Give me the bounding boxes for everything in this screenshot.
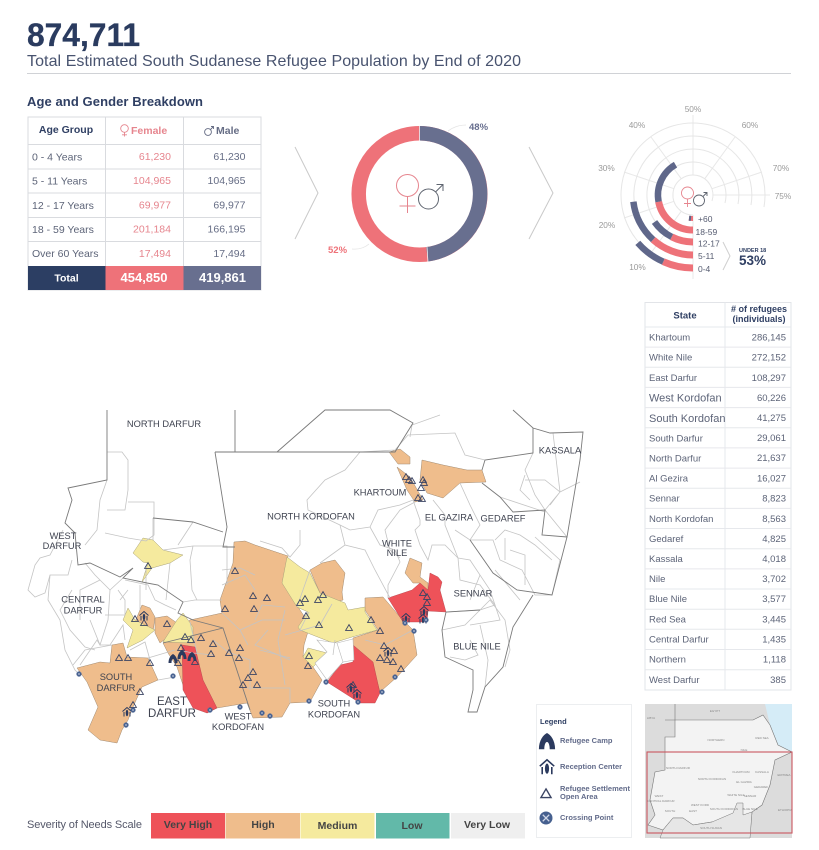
map labels: state names: BLUE NILE (453, 642, 501, 652)
inset map: location of Sudan: WEST KORD (691, 803, 710, 807)
donut chart: gender split: 52% (328, 245, 348, 256)
map labels: state names: DARFUR (43, 541, 82, 551)
title: total refugee population (27, 17, 791, 74)
legend: map symbols: Open Area (560, 792, 598, 801)
table: age and gender breakdown: 61,230 (213, 151, 246, 163)
map boundaries: localities (28, 415, 580, 703)
table: age and gender breakdown: Age Group (39, 124, 93, 136)
table: refugees by state: 286,145 (752, 332, 786, 344)
table: refugees by state: 3,577 (762, 594, 786, 605)
table: refugees by state: South Kordofan (649, 413, 725, 425)
table: refugees by state: 8,823 (762, 494, 786, 504)
radial bar chart: age distribution: 20% (599, 220, 616, 230)
table: refugees by state: Nile (649, 574, 665, 585)
map labels: state names: DARFUR (97, 683, 136, 693)
inset map: location of Sudan: BLUE NILE (742, 807, 758, 811)
table: refugees by state: 385 (770, 675, 786, 686)
map labels: state names: NILE (387, 548, 407, 558)
inset map: location of Sudan (645, 704, 792, 838)
table: refugees by state: 60,226 (757, 393, 786, 404)
radial bar chart: age distribution: 50% (685, 104, 702, 114)
map labels: state names (43, 419, 582, 732)
inset map: location of Sudan: EL GAZIRA (736, 780, 752, 784)
severity scale: Very Low (464, 819, 511, 831)
map icons: refugee settlement triangles (116, 474, 430, 707)
bars: pink female arcs (653, 202, 693, 268)
map areas: unfilled pockets (315, 639, 354, 680)
table: refugees by state: Al Gezira (649, 474, 689, 484)
legend: map symbols: Reception Center (560, 762, 622, 771)
inset map: location of Sudan: SOUTH SUDAN (700, 826, 722, 830)
severity scale: Severity of Needs Scale (27, 819, 142, 831)
inset map: location of Sudan: CENTRAL DARFUR (647, 799, 675, 803)
table: refugees by state: 4,018 (762, 554, 786, 565)
inset map: location of Sudan: WEST (655, 794, 663, 798)
legend: map symbols: Refugee Camp (560, 736, 613, 745)
table: refugees by state: Gedaref (649, 534, 684, 545)
table: refugees by state: Central Darfur (649, 634, 709, 646)
legend: map symbols (536, 704, 632, 838)
radial bar chart: age distribution: 60% (742, 120, 759, 130)
radial bar chart: age distribution: +60 (698, 214, 713, 224)
map icons: reception centers (122, 606, 428, 716)
severity scale: Very High (164, 819, 212, 831)
table: age and gender breakdown: 104,965 (208, 175, 246, 187)
map labels: state names: KORDOFAN (212, 722, 264, 732)
table: refugees by state: Kassala (649, 554, 684, 565)
table: refugees by state: 3,445 (762, 614, 786, 626)
table: refugees by state: State (673, 310, 697, 322)
inset map: location of Sudan: ERITREA (777, 773, 791, 777)
donut chart: gender split: 48% (469, 122, 489, 133)
icon: crossing point (540, 812, 552, 824)
severity scale: High (251, 819, 275, 831)
table: refugees by state: 41,275 (757, 413, 786, 424)
radial bar chart: age distribution: UNDER 18 (739, 248, 766, 254)
map labels: state names: WHITE (382, 538, 412, 548)
map boundaries: states (65, 410, 583, 712)
table: age and gender breakdown: 17,494 (213, 248, 246, 260)
map labels: state names: EL GAZIRA (425, 512, 474, 522)
icon: female symbol (396, 174, 418, 213)
map labels: state names: SOUTH (100, 672, 132, 682)
table: age and gender breakdown: 61,230 (139, 151, 171, 163)
radial bar chart: age distribution: 5-11 (698, 251, 715, 261)
radial bar chart: age distribution: 40% (629, 120, 646, 130)
bars: blue male arcs (633, 165, 691, 262)
table: refugees by state: 1,435 (762, 634, 786, 646)
table: refugees by state: Khartoum (649, 332, 690, 344)
inset map: location of Sudan: NORTH KORDOFAN (698, 777, 726, 781)
table: age and gender breakdown: 0 - 4 Years (32, 152, 82, 164)
map labels: state names: WEST (50, 531, 77, 541)
heading: age and gender breakdown: Age and Gender Breakdown (27, 94, 203, 109)
table: age and gender breakdown: 69,977 (139, 200, 171, 212)
table: refugees by state: Blue Nile (649, 594, 687, 605)
map labels: state names: WEST (225, 712, 252, 722)
table: refugees by state: Northern (649, 654, 686, 666)
table: age and gender breakdown: Over 60 Years (32, 248, 99, 260)
table: refugees by state: 272,152 (752, 352, 786, 364)
title: total refugee population: Total Estimated South Sudanese Refugee Population by End of 2020 (27, 53, 521, 70)
radial bar chart: age distribution: 0-4 (698, 264, 711, 274)
map areas: medium severity (123, 538, 377, 667)
icon: female symbol small (682, 187, 694, 207)
map areas: high severity (77, 449, 486, 743)
icon: male in table header (205, 126, 214, 135)
arrow: chevron left (295, 147, 318, 239)
map icons: refugee camps (168, 650, 196, 663)
inset map: location of Sudan: GEDAREF (754, 785, 768, 789)
table: age and gender breakdown: 104,965 (133, 175, 171, 187)
table: refugees by state: 3,702 (762, 574, 786, 585)
table: refugees by state: North Darfur (649, 454, 701, 464)
severity scale: Medium (318, 820, 357, 832)
donut chart: gender split (328, 122, 489, 262)
table: refugees by state: East Darfur (649, 373, 697, 384)
table: age and gender breakdown: 5 - 11 Years (32, 176, 87, 188)
table: refugees by state: # of refugees (731, 304, 787, 314)
legend: map symbols: Legend (540, 717, 567, 726)
table: age and gender breakdown: 18 - 59 Years (32, 224, 94, 236)
map labels: state names: KASSALA (539, 446, 582, 456)
radial bar chart: age distribution (598, 104, 792, 279)
table: age and gender breakdown: 17,494 (139, 248, 171, 260)
icon: refugee settlement (541, 789, 551, 798)
radial bar chart: age distribution: 75% (775, 191, 792, 201)
map labels: state names: SOUTH (318, 698, 350, 708)
arrow: chevron right (529, 147, 553, 239)
table: refugees by state: 16,027 (757, 474, 786, 484)
table: refugees by state: White Nile (649, 352, 692, 364)
inset map: location of Sudan: SOUTH (665, 809, 675, 813)
map labels: state names: KHARTOUM (354, 488, 406, 498)
table: age and gender breakdown: 419,861 (199, 270, 246, 285)
inset map: location of Sudan: EAST (689, 809, 697, 813)
table: refugees by state: South Darfur (649, 434, 703, 444)
table: refugees by state: 4,825 (762, 534, 786, 545)
map icons: crossing points (76, 617, 429, 728)
radial bar chart: age distribution: 30% (598, 163, 615, 173)
map labels: state names: DARFUR (148, 708, 196, 720)
radial bar chart: age distribution: 10% (629, 262, 646, 272)
table: refugees by state (645, 302, 791, 690)
severity scale (27, 813, 525, 838)
table: age and gender breakdown: 69,977 (213, 200, 246, 212)
table: refugees by state: 8,563 (762, 514, 786, 525)
table: refugees by state: West Kordofan (649, 392, 722, 404)
table: refugees by state: 29,061 (757, 433, 786, 444)
icon: female in table header (121, 125, 128, 136)
map labels: state names: GEDAREF (481, 514, 526, 524)
icon: male symbol small (694, 192, 707, 206)
map labels: state names: SENNAR (454, 588, 493, 598)
map labels: state names: CENTRAL (61, 594, 105, 604)
inset map: location of Sudan: NILE (741, 748, 747, 752)
inset map: location of Sudan: NORTH DARFUR (666, 766, 691, 770)
inset map: location of Sudan: LIBYA (647, 716, 655, 720)
inset map: location of Sudan: WHITE NILE (727, 793, 745, 797)
table: refugees by state: Red Sea (649, 614, 687, 626)
table: age and gender breakdown (28, 117, 261, 290)
inset map: location of Sudan: EGYPT (710, 709, 720, 713)
table: refugees by state: North Kordofan (649, 514, 713, 525)
map: severity of needs by locality (28, 410, 583, 743)
table: age and gender breakdown: 166,195 (208, 224, 246, 236)
radial bar chart: age distribution: 12-17 (698, 238, 720, 248)
map labels: state names: NORTH KORDOFAN (267, 512, 355, 522)
icon: male symbol (418, 184, 443, 209)
icon: reception center (540, 760, 554, 774)
inset map: location of Sudan: RED SEA (755, 736, 769, 740)
inset map: location of Sudan: ETHIOPIA (778, 808, 792, 812)
table: refugees by state: West Darfur (649, 675, 700, 686)
table: refugees by state: (individuals) (732, 314, 786, 324)
table: age and gender breakdown: 201,184 (133, 224, 171, 236)
inset map: location of Sudan: SENNAR (744, 794, 757, 798)
map labels: state names: DARFUR (64, 606, 103, 616)
map areas: very high severity (182, 573, 446, 713)
radial bar chart: age distribution: 53% (739, 253, 766, 268)
inset map: location of Sudan: KASSALA (755, 770, 769, 774)
inset map: location of Sudan: NORTHERN (708, 738, 724, 742)
map labels: state names: NORTH DARFUR (127, 419, 201, 429)
radial bar chart: age distribution: 18-59 (696, 227, 718, 237)
icon: refugee camp (539, 733, 555, 749)
radial bar chart: age distribution: 70% (773, 163, 790, 173)
table: refugees by state: 108,297 (752, 373, 786, 384)
inset map: location of Sudan: SOUTH KORDOFAN (710, 807, 738, 811)
table: age and gender breakdown: 12 - 17 Years (32, 200, 94, 212)
table: refugees by state: Sennar (649, 494, 680, 504)
inset map: location of Sudan: KHARTOUM (732, 770, 750, 774)
legend: map symbols: Crossing Point (560, 813, 614, 822)
map labels: state names: KORDOFAN (308, 710, 360, 720)
table: age and gender breakdown: Male (216, 125, 240, 137)
severity scale: Low (402, 820, 423, 832)
table: refugees by state: 1,118 (763, 654, 786, 666)
title: total refugee population: 874,711 (27, 17, 140, 53)
map labels: state names: EAST (157, 696, 187, 708)
table: age and gender breakdown: Female (131, 125, 167, 137)
table: age and gender breakdown: 454,850 (120, 270, 168, 285)
legend: map symbols: Refugee Settlement (560, 784, 631, 793)
table: refugees by state: 21,637 (757, 453, 786, 464)
table: age and gender breakdown: Total (54, 272, 79, 284)
